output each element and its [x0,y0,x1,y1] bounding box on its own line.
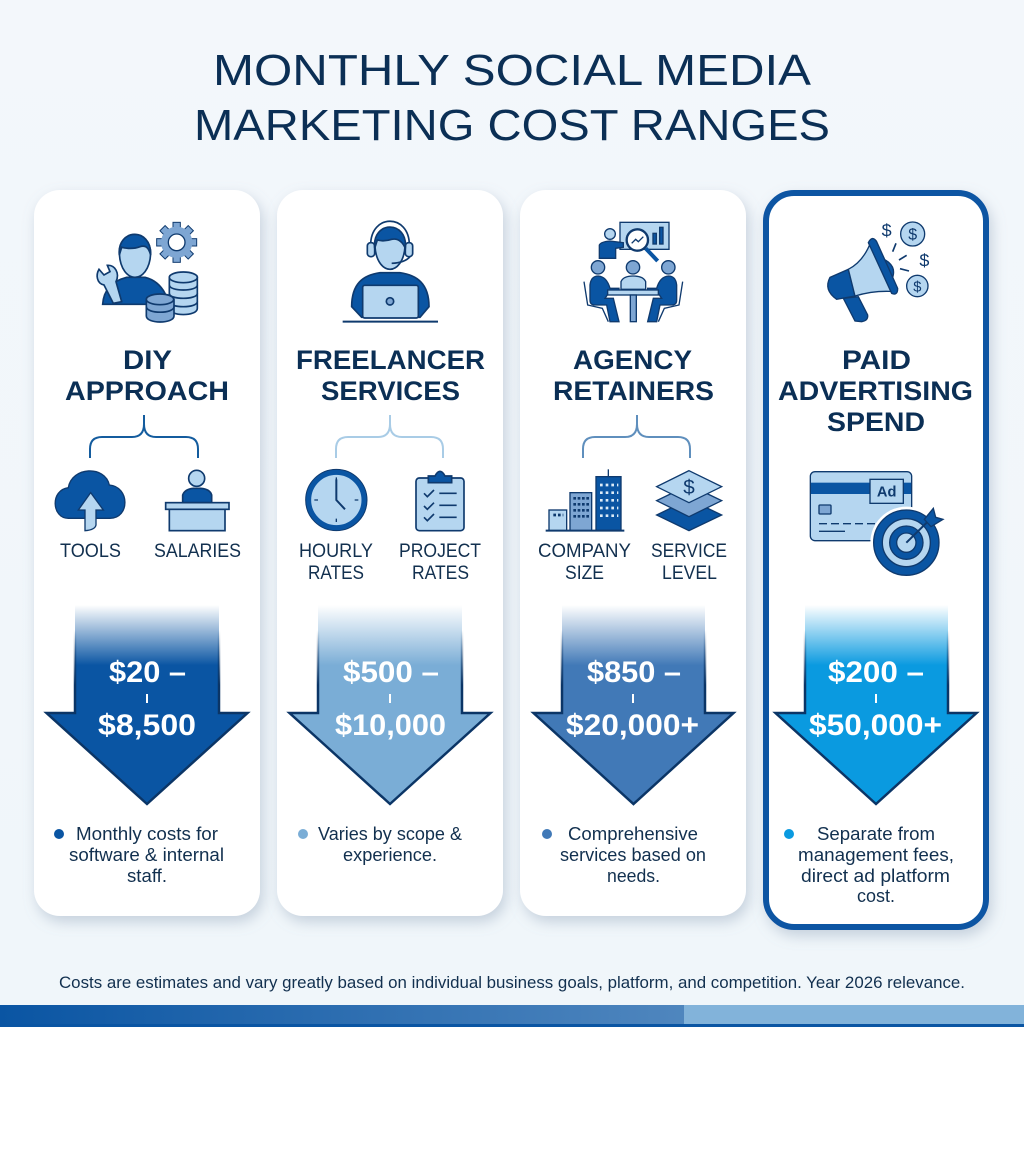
icon: megaphone with dollars: $ [913,279,921,295]
price arrow: $500 – [343,656,439,689]
icon: ad card with target [810,472,943,579]
description [69,824,224,886]
heading: RETAINERS [553,376,714,406]
icon: team meeting with analytics screen [584,222,683,322]
price arrow [534,605,734,804]
price arrow: $8,500 [98,709,196,742]
icon: clock [306,469,367,531]
title [194,46,830,150]
title: MARKETING COST RANGES [194,101,830,150]
heading: ADVERTISING [778,376,973,406]
icon: person at desk [166,470,229,531]
bullet [54,829,64,839]
description [318,824,462,865]
icon: megaphone with dollars: $ [908,227,917,244]
description: services based on [560,845,706,865]
icon: person with wrench, gear and coins [97,222,197,322]
label: tools: TOOLS [60,541,121,562]
icon: cloud upload [55,471,125,531]
icon: layered service tiers: $ [683,476,695,499]
bullet [298,829,308,839]
bracket [90,415,198,458]
footer colour bar [0,1005,1024,1027]
description: Varies by scope & [318,824,462,844]
title: MONTHLY SOCIAL MEDIA [213,46,812,95]
heading [65,345,229,406]
icon: clipboard checklist [416,471,464,531]
label: project rates [399,541,481,584]
description: staff. [127,866,167,886]
bracket [583,415,690,458]
description [560,824,706,886]
label: company size [538,541,631,584]
description: cost. [857,886,895,906]
heading: DIY [123,345,172,375]
panel: freelancer services [277,190,503,916]
price arrow: $50,000+ [809,709,942,742]
footnote: Costs are estimates and vary greatly based on individual business goals, platform, and competition. Year 2026 relevance. [59,974,965,992]
label: company size: SIZE [565,563,604,584]
description: Comprehensive [568,824,698,844]
bullet [784,829,794,839]
panel: paid advertising spend [766,193,986,927]
icon: city buildings [546,469,624,531]
label: hourly rates: RATES [308,563,364,584]
description: direct ad platform [801,866,950,886]
label: salaries: SALARIES [154,541,241,562]
heading: SPEND [827,407,925,437]
price arrow: $20,000+ [566,709,699,742]
heading: AGENCY [573,345,692,375]
panel: agency retainers [520,190,746,916]
description [798,824,954,906]
price arrow [776,605,976,804]
heading: FREELANCER [296,345,485,375]
heading: PAID [842,345,911,375]
label: company size: COMPANY [538,541,631,562]
price arrow [46,605,248,804]
description: needs. [607,866,660,886]
description: management fees, [798,845,954,865]
label: project rates: RATES [412,563,469,584]
price arrow [290,605,490,804]
icon: freelancer with headset and laptop [343,221,438,322]
bullet [542,829,552,839]
icon: layered service tiers [657,471,722,531]
label: service level [651,541,727,584]
heading [778,345,973,437]
label: service level: SERVICE [651,541,727,562]
description: Monthly costs for [76,824,218,844]
heading: APPROACH [65,376,229,406]
label: hourly rates [299,541,373,584]
panel: DIY approach [34,190,260,916]
heading [296,345,485,406]
price arrow: $20 – [109,656,186,689]
price arrow: $850 – [587,656,681,689]
label: service level: LEVEL [662,563,717,584]
icon: ad card with target: Ad [877,485,896,501]
heading: SERVICES [321,376,460,406]
label: project rates: PROJECT [399,541,481,562]
icon: megaphone with dollars: $ [919,251,929,271]
price arrow: $200 – [828,656,924,689]
heading [553,345,714,406]
icon: megaphone with dollars [828,221,929,322]
description: experience. [343,845,437,865]
bracket [336,415,443,458]
label: hourly rates: HOURLY [299,541,373,562]
icon: megaphone with dollars: $ [882,221,892,241]
description: software & internal [69,845,224,865]
price arrow: $10,000 [335,709,446,742]
description: Separate from [817,824,935,844]
